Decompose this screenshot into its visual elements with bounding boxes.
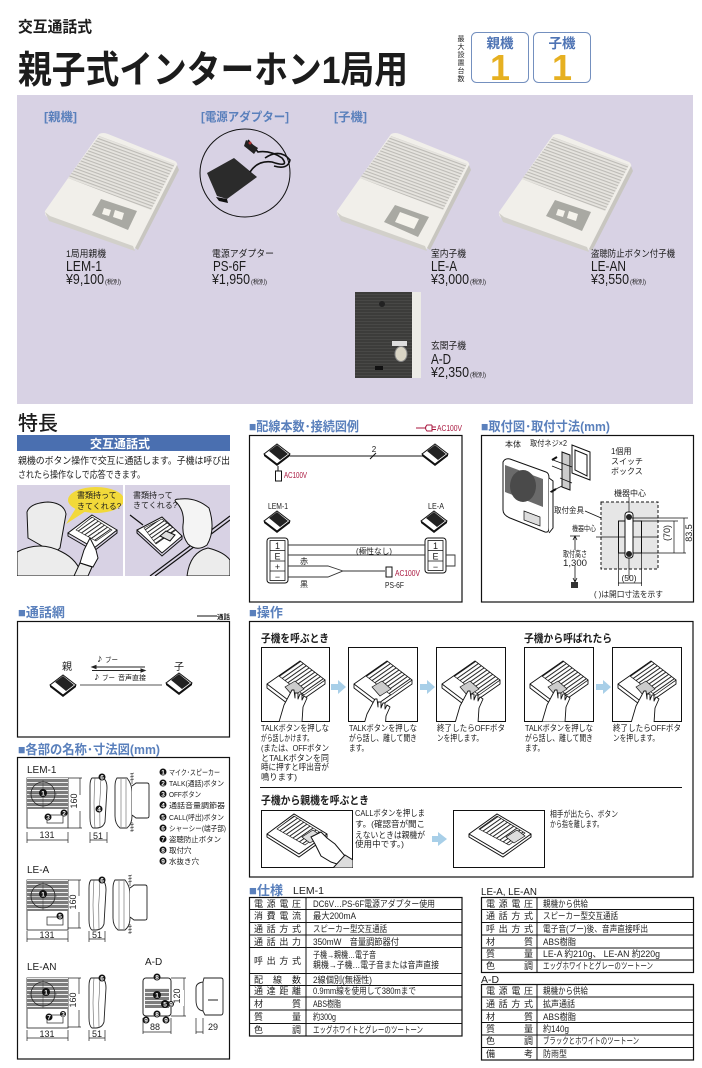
product photo: LEM-1 — [45, 133, 179, 251]
category heading: child: [子機] — [334, 109, 367, 124]
mounting dimensions — [596, 497, 694, 586]
label: switch box: スイッチ — [611, 457, 643, 466]
product label: LE-AN: ¥3,550 — [590, 271, 629, 288]
table: 通 話 方 式 — [486, 910, 533, 921]
parts legend: 4 — [161, 802, 165, 810]
step 5 text: ンを押します。 — [613, 733, 659, 743]
adapter plug — [386, 567, 421, 578]
step 1 text: (または、OFFボタン — [261, 743, 329, 753]
terminal block: LEM-1: + — [275, 562, 280, 572]
call step 2 illustration — [453, 810, 545, 868]
terminal block: LE-A — [425, 538, 446, 573]
heading — [249, 883, 324, 898]
icon: LEM-1 — [264, 511, 290, 533]
model A-D drawings: 9 — [169, 1002, 173, 1008]
model LE-A drawings: 160 — [68, 894, 78, 910]
heading: LEM-1 — [293, 885, 324, 897]
call step 1 text: えないときは親機が — [355, 830, 425, 840]
table: 質 量 — [486, 948, 533, 959]
model LE-AN drawings: LE-AN — [27, 962, 56, 973]
model A-D drawings: 1 — [155, 992, 159, 1000]
table: 350mW 音量調節器付 — [313, 936, 399, 947]
feature bar: 交互通話式 — [90, 436, 150, 451]
label LE-A: LE-A — [428, 502, 445, 511]
product label: PS-6F: ¥1,950 — [211, 271, 250, 288]
parts legend: TALK(通話)ボタン — [169, 778, 224, 788]
parts legend: 9 — [161, 858, 165, 866]
max installable units — [458, 32, 590, 88]
table: 呼 出 方 式 — [254, 955, 301, 966]
product label: LEM-1 — [65, 248, 121, 288]
model LEM-1 drawings — [27, 765, 149, 843]
table: 通 話 方 式 — [254, 923, 301, 934]
step 2 text — [349, 723, 417, 753]
table: 約300g — [313, 1011, 336, 1022]
step 1 text: TALKボタンを押しな — [261, 723, 329, 733]
heading: ■各部の名称･寸法図(mm) — [18, 742, 160, 757]
table: ブラックとホワイトのツートーン — [543, 1035, 639, 1046]
parts legend: シャーシー(端子部) — [169, 823, 226, 833]
legend: 通話 — [217, 612, 230, 621]
model LE-A drawings: 5 — [58, 914, 62, 920]
table: 防雨型 — [543, 1048, 567, 1059]
arrow — [432, 832, 447, 846]
product photo: power adapter — [200, 129, 290, 217]
label polarity: (極性なし) — [356, 546, 392, 556]
table: ABS樹脂 — [543, 1011, 576, 1022]
parts legend: CALL(呼出)ボタン — [169, 812, 224, 822]
step 3 text — [437, 723, 505, 743]
table: 電 源 電 圧 — [486, 986, 533, 996]
table: ABS樹脂 — [543, 936, 576, 947]
step 2 text: TALKボタンを押しな — [349, 723, 417, 733]
product label: A-D: ¥2,350 — [430, 364, 469, 381]
terminal block: LE-A: E — [432, 552, 439, 562]
model LE-AN drawings: 6 — [100, 976, 104, 982]
model LEM-1 drawings: 160 — [69, 793, 79, 809]
table — [481, 897, 694, 972]
table — [481, 984, 694, 1060]
product label: LE-A: ¥3,000 — [430, 271, 469, 288]
arrow — [596, 680, 611, 694]
call step 2 text: 相手が出たら、ボタン — [550, 809, 618, 819]
table: LE-A 約210g、 LE-AN 約220g — [543, 948, 660, 959]
category label: 交互通話式 — [18, 18, 92, 36]
vertical caption: 台 — [458, 66, 464, 75]
model LEM-1 drawings: 2 — [62, 810, 66, 818]
parts legend: OFFボタン — [169, 790, 201, 799]
mounting dimensions: (50) — [621, 573, 637, 583]
model LE-AN drawings — [27, 962, 106, 1041]
legend: AC100V: AC100V — [437, 424, 463, 433]
step 4 text — [525, 723, 593, 753]
step 2 text: がら話し、離して聞き — [349, 733, 417, 743]
installation height: 機器中心 — [572, 523, 596, 533]
heading: ■操作 — [249, 605, 283, 620]
parts legend: 2 — [161, 780, 165, 788]
model A-D drawings: 120 — [172, 988, 182, 1004]
terminal block: LE-A: 1 — [433, 541, 438, 551]
step 4 illustration — [524, 647, 594, 722]
icon: parent — [50, 675, 76, 697]
table: 色 調 — [486, 1035, 533, 1046]
terminal block: LEM-1: 1 — [275, 541, 280, 551]
model LEM-1 drawings: 51 — [93, 831, 103, 841]
table: 通 話 方 式 — [486, 998, 533, 1009]
note: ( )は開口寸法を示す — [594, 589, 663, 599]
product label: LE-A: LE-A — [431, 258, 457, 275]
direction arrows — [92, 666, 145, 672]
step 1 text: 時に押すと呼出音が — [261, 762, 329, 772]
model A-D drawings: 8 — [155, 1012, 159, 1018]
section: mounting — [481, 419, 694, 602]
step 4 text: がら話し、離して聞き — [525, 733, 593, 743]
step 5 text — [613, 723, 681, 743]
subheading: called by child: 子機から呼ばれたら — [524, 631, 612, 645]
step 5 text: 終了したらOFFボタ — [613, 723, 681, 733]
label: parent: 親 — [62, 661, 72, 673]
product photo: LE-A — [337, 133, 471, 251]
table: 2線個別(無極性) — [313, 974, 372, 985]
top wiring line: 2 — [372, 445, 377, 454]
adapter plug: AC100V — [395, 569, 421, 578]
arrow — [420, 680, 435, 694]
label: switch box: 1個用 — [611, 446, 631, 456]
product label: LE-AN — [590, 248, 675, 288]
model LE-AN drawings: 51 — [92, 1029, 102, 1039]
label: body: 本体 — [505, 439, 521, 449]
product label: LEM-1: ¥9,100 — [65, 271, 104, 288]
product label: LE-AN: (税別) — [630, 278, 646, 286]
vertical caption: 置 — [458, 59, 464, 67]
category heading: adapter: [電源アダプター] — [201, 109, 289, 124]
call step 2 text: から指を離します。 — [550, 819, 603, 829]
table: 親機→子機…電子音または音声直接 — [313, 959, 439, 970]
step 1 text: がら話しかけます。 — [261, 733, 313, 743]
label LEM-1: LEM-1 — [268, 502, 288, 511]
legend: AC100V — [416, 424, 463, 433]
table: 親機から供給 — [543, 985, 588, 996]
table: 電 源 電 圧 — [254, 899, 301, 909]
call step 1 text: す。(確認音が聞こ — [355, 819, 425, 829]
mounting dimensions: 83.5 — [684, 524, 694, 542]
model A-D drawings: 8 — [155, 974, 159, 982]
speech text: 書類持って — [133, 490, 173, 500]
installation height: 1,300 — [563, 558, 587, 568]
step 4 text: ます。 — [525, 743, 544, 753]
model LE-A drawings: 51 — [92, 930, 102, 940]
subheading: calling child: 子機を呼ぶとき — [261, 631, 329, 645]
feature description: 親機のボタン操作で交互に通話します。子機は呼び出 — [18, 454, 230, 467]
product label: A-D: 玄関子機 — [431, 340, 466, 352]
model A-D drawings: 29 — [208, 1022, 218, 1032]
heading: ■取付図･取付寸法(mm) — [481, 419, 610, 434]
table: 備 考 — [486, 1048, 533, 1059]
subheading: child calling parent: 子機から親機を呼ぶとき — [261, 793, 369, 807]
section: wiring diagram — [249, 419, 463, 602]
arrow — [331, 680, 346, 694]
speech bubble: きてくれる? — [77, 502, 122, 511]
table: 電 源 電 圧 — [486, 899, 533, 909]
section: operation — [249, 605, 693, 877]
table: スピーカー型交互通話 — [313, 924, 387, 934]
model A-D drawings: 88 — [150, 1022, 160, 1032]
terminal block: LEM-1 — [267, 538, 288, 583]
step 3 text: ンを押します。 — [437, 733, 483, 743]
section: part names and dimensions — [18, 742, 230, 1059]
device illustration — [503, 445, 590, 533]
table: エッグホワイトとグレーのツートーン — [543, 960, 653, 971]
model A-D drawings: 9 — [144, 1018, 148, 1024]
installation height — [562, 523, 596, 588]
heading: LE-A, LE-AN — [481, 886, 537, 898]
model LE-AN drawings: 1 — [44, 990, 48, 996]
table: エッグホワイトとグレーのツートーン — [313, 1024, 423, 1035]
mounting dimensions: (70) — [662, 525, 672, 541]
vertical caption: 数 — [458, 74, 464, 83]
table: 電子音(ブー)後、音声直接呼出 — [543, 923, 648, 934]
table: 材 質 — [486, 1011, 533, 1022]
model A-D drawings: A-D — [145, 957, 162, 968]
step 2 illustration — [348, 647, 418, 722]
product label: PS-6F: 電源アダプター — [212, 248, 274, 260]
heading: A-D — [481, 974, 500, 986]
table: 色 調 — [486, 960, 533, 971]
step 3 text: 終了したらOFFボタ — [437, 723, 505, 733]
product label: LE-A: (税別) — [470, 278, 486, 286]
parts legend: 盗聴防止ボタン — [169, 834, 221, 844]
tones and audio labels: ♪ — [97, 653, 102, 665]
child count box: 子機 — [548, 35, 576, 51]
plug and AC label — [276, 466, 308, 481]
terminal block: LE-A: − — [433, 562, 438, 572]
call step 1 text — [355, 808, 425, 849]
illustration: person pressing parent unit — [17, 485, 123, 576]
legend — [197, 612, 230, 621]
product photo: A-D — [355, 292, 421, 378]
parts legend: 通話音量調節器 — [169, 800, 226, 810]
parent count box — [472, 32, 528, 88]
parts legend: 5 — [161, 814, 165, 822]
table: 材 質 — [254, 998, 301, 1009]
parts legend: マイク･スピーカー — [169, 768, 220, 777]
product label: LE-A: 室内子機 — [431, 248, 466, 260]
plug and AC label: AC100V — [284, 471, 308, 480]
product label: LEM-1: LEM-1 — [66, 258, 102, 275]
model LE-A drawings: 1 — [41, 892, 45, 898]
label: bracket — [554, 505, 622, 527]
table: 0.9mm線を使用して380mまで — [313, 985, 416, 996]
icon: child — [166, 673, 192, 695]
model LE-A drawings: LE-A — [27, 865, 50, 876]
parts legend: 取付穴 — [169, 845, 192, 855]
product label: A-D: A-D — [431, 351, 451, 368]
section: specs A-D — [481, 974, 694, 1060]
child count box — [534, 32, 590, 88]
terminal block: LEM-1: − — [275, 572, 280, 582]
step 3 illustration — [436, 647, 506, 722]
model LE-AN drawings: 7 — [47, 1014, 51, 1022]
model LEM-1 drawings: 131 — [39, 830, 55, 840]
product label: A-D — [430, 340, 486, 381]
installation height: 取付高さ — [563, 549, 587, 559]
step 1 text: 鳴ります) — [261, 772, 297, 782]
parts legend — [160, 768, 226, 866]
model LEM-1 drawings: 3 — [46, 814, 50, 822]
feature bar — [17, 435, 230, 451]
label: child: 子 — [174, 661, 184, 673]
step 1 text: とTALKボタンを同 — [261, 753, 329, 763]
call step 1 illustration — [261, 810, 353, 868]
table: 拡声通話 — [543, 998, 575, 1009]
child count box: 1 — [552, 47, 572, 88]
parts legend: 6 — [161, 826, 165, 832]
product label: LE-AN: LE-AN — [591, 258, 626, 275]
label: center: 機器中心 — [614, 488, 646, 498]
label: screws: 取付ネジ×2 — [530, 438, 567, 448]
model A-D drawings: 9 — [164, 1018, 168, 1024]
speech text: きてくれる? — [133, 501, 178, 510]
step 1 illustration — [261, 647, 330, 722]
icon: parent unit — [264, 444, 290, 466]
product label: PS-6F — [211, 248, 274, 288]
label: bracket: 取付金具 — [554, 505, 584, 515]
parent count box: 親機 — [486, 35, 514, 51]
title: 親子式インターホン1局用 — [18, 50, 408, 92]
heading: 特長 — [18, 412, 58, 435]
model LE-A drawings — [27, 865, 147, 942]
section: call network — [18, 605, 230, 737]
terminal block: LEM-1: E — [274, 552, 281, 562]
table: 呼 出 方 式 — [486, 923, 533, 934]
model LEM-1 drawings: LEM-1 — [27, 765, 57, 776]
model LE-A drawings: 6 — [100, 878, 104, 884]
product label: LEM-1: (税別) — [105, 278, 121, 286]
product label: PS-6F: PS-6F — [213, 258, 246, 275]
product label: LE-AN: 盗聴防止ボタン付子機 — [591, 248, 675, 260]
model A-D drawings: 5 — [163, 1002, 167, 1008]
speech bubble: 書類持って — [77, 490, 117, 500]
model LE-AN drawings: 3 — [61, 1012, 65, 1018]
table: 最大200mA — [313, 910, 356, 921]
tones and audio labels: ♪ — [94, 671, 100, 683]
table: 質 量 — [486, 1023, 533, 1034]
call step 1 text: 使用中です。) — [355, 839, 404, 849]
parts legend: 1 — [161, 770, 165, 776]
table: 親機から供給 — [543, 898, 588, 909]
model A-D drawings — [142, 957, 223, 1034]
product label: LE-A — [430, 248, 486, 288]
wires — [288, 545, 455, 577]
label: switch box: ボックス — [611, 467, 643, 476]
tones and audio labels — [94, 653, 146, 683]
table: DC6V…PS-6F電源アダプター使用 — [313, 898, 435, 909]
panel: product lineup — [17, 95, 693, 404]
parts legend: 8 — [161, 848, 165, 854]
table: 通 話 出 力 — [254, 936, 301, 947]
product photo: LE-AN — [499, 134, 633, 252]
model LEM-1 drawings: 1 — [41, 790, 45, 798]
parts legend: 7 — [161, 836, 165, 844]
model LE-A drawings: 131 — [39, 930, 55, 940]
parts legend: 3 — [161, 792, 165, 798]
section: specs LEM-1 — [249, 883, 462, 1036]
tones and audio labels: 音声直接 — [118, 673, 146, 682]
icon: LE-A — [421, 511, 447, 533]
connection line — [80, 684, 162, 686]
features section — [17, 412, 230, 576]
category heading: parent: [親機] — [44, 109, 77, 124]
product label: LEM-1: 1局用親機 — [66, 248, 106, 260]
label PS-6F: PS-6F — [385, 581, 404, 590]
table: 通 達 距 離 — [254, 985, 301, 996]
product label: A-D: (税別) — [470, 371, 486, 379]
top wiring line — [290, 445, 423, 459]
step 5 illustration — [612, 647, 682, 722]
model LE-AN drawings: 131 — [39, 1029, 55, 1039]
vertical caption: 大 — [458, 42, 464, 51]
feature description — [18, 454, 230, 481]
call step 1 text: CALLボタンを押しま — [355, 808, 425, 818]
call step 2 text — [550, 809, 618, 829]
table: ABS樹脂 — [313, 998, 341, 1009]
vertical caption: 設 — [458, 51, 464, 59]
table: 材 質 — [486, 936, 533, 947]
label red: 赤 — [300, 557, 308, 566]
parts legend: 水抜き穴 — [169, 856, 199, 866]
parent count box: 1 — [490, 47, 510, 88]
model LEM-1 drawings: 6 — [100, 774, 104, 782]
tones and audio labels: ブー — [102, 673, 115, 682]
model LE-AN drawings: 160 — [68, 992, 78, 1008]
vertical caption: 最 — [458, 35, 464, 43]
icon: child unit — [422, 444, 448, 466]
table: スピーカー型交互通話 — [543, 911, 618, 921]
feature description: されたら操作なしで応答できます。 — [18, 468, 145, 481]
table: 質 量 — [254, 1011, 301, 1022]
table: 配 線 数 — [254, 974, 301, 985]
product label: PS-6F: (税別) — [251, 278, 267, 286]
table — [249, 897, 462, 1036]
heading: ■通話網 — [18, 605, 65, 620]
table: 約140g — [543, 1023, 569, 1034]
table: 色 調 — [254, 1024, 301, 1035]
heading: ■仕様 — [249, 883, 283, 898]
step 1 text — [261, 723, 329, 782]
step 4 text: TALKボタンを押しな — [525, 723, 593, 733]
heading: ■配線本数･接続図例 — [249, 419, 359, 434]
illustration: person answering child unit — [125, 485, 230, 576]
model LEM-1 drawings: 4 — [97, 806, 101, 814]
table: 消 費 電 流 — [254, 910, 301, 921]
table: 子機→親機…電子音 — [313, 949, 376, 960]
step 2 text: ます。 — [349, 743, 368, 753]
label black: 黒 — [300, 580, 308, 589]
section: specs LE-A, LE-AN — [481, 886, 694, 972]
tones and audio labels: ブー — [105, 655, 118, 664]
